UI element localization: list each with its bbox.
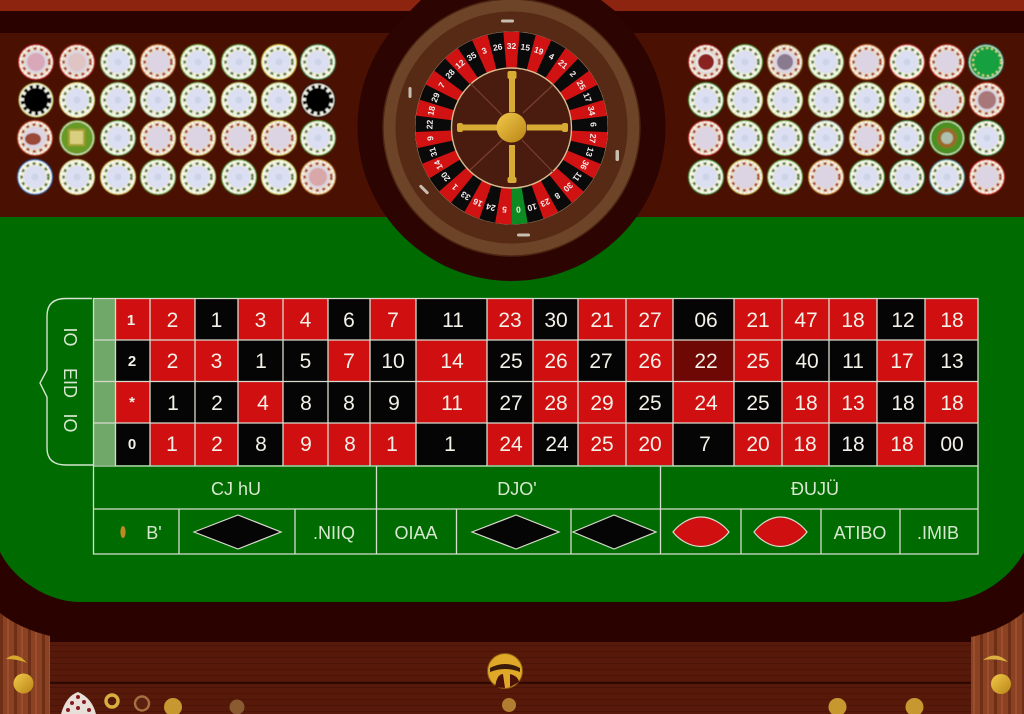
wheel centre <box>452 68 572 188</box>
row 2: 25 <box>499 350 523 373</box>
top red rail left <box>0 0 421 11</box>
bottom chip pile <box>61 692 96 714</box>
red pockets <box>427 43 596 213</box>
bracket labels <box>60 327 80 433</box>
row 1: 27 <box>638 309 662 332</box>
row 3: 29 <box>590 392 614 415</box>
row 1: 4 <box>300 309 312 332</box>
left rack centre accents <box>25 53 327 186</box>
pocket numbers <box>424 41 599 215</box>
row 4: 18 <box>890 433 914 456</box>
row 1: 06 <box>694 309 718 332</box>
row 2: 26 <box>544 350 568 373</box>
even-money label 3: OIAA <box>394 523 438 543</box>
row 2: 40 <box>795 350 819 373</box>
dozen label 2: DJO' <box>497 479 537 499</box>
row 1: 23 <box>498 309 522 332</box>
row 2: 5 <box>300 350 311 373</box>
row 1 <box>116 299 978 340</box>
even-money label 2: .NIIQ <box>313 523 355 543</box>
row 4: 00 <box>940 433 964 456</box>
pocket numbers: 25 <box>575 78 588 92</box>
pocket numbers: 11 <box>571 170 584 184</box>
black diamond 1 <box>194 515 281 549</box>
wood front panel <box>50 642 971 714</box>
row 4: 2 <box>211 433 223 456</box>
pocket numbers: 27 <box>587 133 598 144</box>
centre gold emblem <box>488 654 522 688</box>
black diamond 3 <box>573 515 656 549</box>
pocket numbers: 12 <box>453 57 467 71</box>
bracket labels: IO <box>60 413 80 433</box>
left chip rack <box>17 44 336 195</box>
row 1: 1 <box>127 312 135 329</box>
row 3: 18 <box>794 392 818 415</box>
pocket numbers: 28 <box>443 67 457 81</box>
row 4: 18 <box>841 433 865 456</box>
row 1: 12 <box>891 309 915 332</box>
row 2: 27 <box>589 350 613 373</box>
pocket numbers: 22 <box>424 119 435 129</box>
wheel bowl <box>396 12 628 244</box>
even-money label 1: B' <box>146 523 162 543</box>
row 4: 18 <box>793 433 817 456</box>
black pockets <box>433 50 590 206</box>
row 1: 11 <box>442 309 464 332</box>
row 4: 7 <box>699 433 711 456</box>
pocket numbers: 4 <box>547 51 556 62</box>
row 3: 8 <box>300 392 312 415</box>
row 3: 18 <box>940 392 964 415</box>
row 2: 14 <box>440 350 464 373</box>
green felt <box>0 217 1024 602</box>
black diamond 2 <box>472 515 559 549</box>
bronze ring coin <box>135 696 149 710</box>
even-money label 4: ATIBO <box>834 523 886 543</box>
row 1: 2 <box>167 309 178 332</box>
row 4: 1 <box>166 433 178 456</box>
dozen label 1: CJ hU <box>211 479 261 499</box>
pocket numbers: 5 <box>502 205 507 215</box>
gold hub <box>496 112 526 142</box>
pocket numbers: 30 <box>561 180 575 194</box>
panel: left chip tray <box>0 33 420 218</box>
row 4: 20 <box>638 433 662 456</box>
bracket labels: IO <box>60 327 80 347</box>
pocket numbers: 8 <box>552 190 562 202</box>
pocket numbers: 7 <box>436 80 447 90</box>
row 1: 7 <box>387 309 399 332</box>
row 2 <box>116 340 978 381</box>
row 2: 10 <box>381 350 405 373</box>
row 3: 13 <box>841 392 865 415</box>
gold coin <box>164 698 182 714</box>
row 3: 25 <box>638 392 662 415</box>
row 2: 2 <box>167 350 178 373</box>
green zero pocket <box>427 43 596 213</box>
row 3: 18 <box>891 392 915 415</box>
row 4: 8 <box>344 433 356 456</box>
row 4: 9 <box>300 433 312 456</box>
row 4: 24 <box>545 433 569 456</box>
pocket numbers: 34 <box>586 105 598 117</box>
row 2: 2 <box>128 353 136 370</box>
pocket numbers: 29 <box>429 91 442 104</box>
row 2: 3 <box>211 350 222 373</box>
pocket numbers: 23 <box>539 196 552 209</box>
left gold ornament <box>6 655 34 694</box>
pocket numbers: 35 <box>465 50 478 63</box>
right gold ornament <box>983 655 1011 694</box>
row 2: 13 <box>940 350 964 373</box>
row 3: 28 <box>544 392 568 415</box>
even-money label 5: .IMIB <box>917 523 959 543</box>
row 3: 9 <box>388 392 400 415</box>
bet layout: left bracket <box>40 298 93 465</box>
dozen label 3: ÐUJÜ <box>791 479 839 499</box>
row 4: 1 <box>444 433 456 456</box>
row 3 <box>116 381 978 423</box>
right gold coin 2 <box>906 698 924 714</box>
row 3: 8 <box>343 392 355 415</box>
pocket numbers: 18 <box>425 105 437 116</box>
pocket numbers: 0 <box>515 205 521 215</box>
pocket numbers: 26 <box>492 41 503 53</box>
row 4: 20 <box>746 433 770 456</box>
row 1: 1 <box>211 309 222 332</box>
row 2: 26 <box>638 350 662 373</box>
row 2: 25 <box>746 350 770 373</box>
bracket labels: EID <box>60 368 80 398</box>
right wood leg <box>971 612 1024 714</box>
icon: small gold marker <box>120 526 126 538</box>
row 3: 2 <box>211 392 223 415</box>
pocket numbers: 21 <box>556 57 570 71</box>
pocket numbers: 31 <box>427 146 439 158</box>
panel: right chip tray <box>604 33 1024 218</box>
gold cross arms <box>457 71 568 183</box>
right rack centre accents <box>697 46 1002 154</box>
row 2: 7 <box>343 350 355 373</box>
row 1: 30 <box>544 309 568 332</box>
row 3: 25 <box>746 392 770 415</box>
pocket numbers: 14 <box>432 158 445 171</box>
red diamond 1 <box>673 517 729 546</box>
wheel surround <box>358 0 666 281</box>
bronze coin <box>230 700 244 714</box>
pocket numbers: 32 <box>507 41 516 51</box>
red diamond 2 <box>754 517 807 546</box>
ball track markers <box>408 20 619 236</box>
left wood leg <box>0 613 50 714</box>
chip pile dots <box>66 695 91 712</box>
pocket numbers: 2 <box>568 69 579 79</box>
gold ring coin <box>106 695 118 707</box>
wheel rim <box>383 0 640 256</box>
roulette wheel <box>358 0 666 281</box>
row 2: 22 <box>694 350 718 373</box>
row 4: 1 <box>386 433 398 456</box>
row 1: 18 <box>940 309 964 332</box>
right chip rack <box>688 44 1005 195</box>
pocket numbers: 3 <box>480 45 488 56</box>
row 4: 24 <box>499 433 523 456</box>
right gold coin 1 <box>828 698 846 714</box>
row 3: 11 <box>441 392 463 415</box>
row 4: 8 <box>255 433 267 456</box>
pocket numbers: 16 <box>471 196 484 209</box>
row 3: 27 <box>499 392 523 415</box>
row 3: 4 <box>257 392 269 415</box>
pocket numbers: 20 <box>439 170 452 184</box>
row 3: 1 <box>167 392 179 415</box>
spokes <box>470 83 553 172</box>
pocket track <box>415 32 608 224</box>
pocket numbers: 6 <box>588 122 599 127</box>
pocket numbers: 1 <box>449 182 460 192</box>
row 3: * <box>129 394 135 411</box>
wood plank seam <box>50 682 971 684</box>
row 2: 1 <box>255 350 267 373</box>
row 1: 6 <box>343 309 355 332</box>
pocket numbers: 9 <box>425 135 435 141</box>
row 4: 25 <box>590 433 614 456</box>
pocket numbers: 33 <box>459 189 472 203</box>
row 3: 24 <box>694 392 718 415</box>
pocket numbers: 24 <box>485 201 497 213</box>
row 1: 3 <box>255 309 266 332</box>
row 4: 0 <box>128 436 136 453</box>
row 2: 17 <box>890 350 914 373</box>
pocket numbers: 17 <box>581 91 594 104</box>
pocket numbers: 36 <box>578 158 591 172</box>
row 1: 21 <box>590 309 614 332</box>
number grid <box>116 299 978 465</box>
pocket numbers: 10 <box>526 201 538 213</box>
centre small coin <box>502 698 516 712</box>
pocket numbers: 15 <box>520 41 531 53</box>
pocket numbers: 19 <box>533 44 545 57</box>
pocket numbers: 13 <box>584 146 596 158</box>
row 1: 47 <box>794 309 818 332</box>
row 1: 21 <box>746 309 770 332</box>
row 1: 18 <box>841 309 865 332</box>
green strip column <box>94 299 115 465</box>
row 2: 11 <box>842 350 864 373</box>
top red rail right <box>601 0 1024 11</box>
row 4 <box>116 423 978 465</box>
